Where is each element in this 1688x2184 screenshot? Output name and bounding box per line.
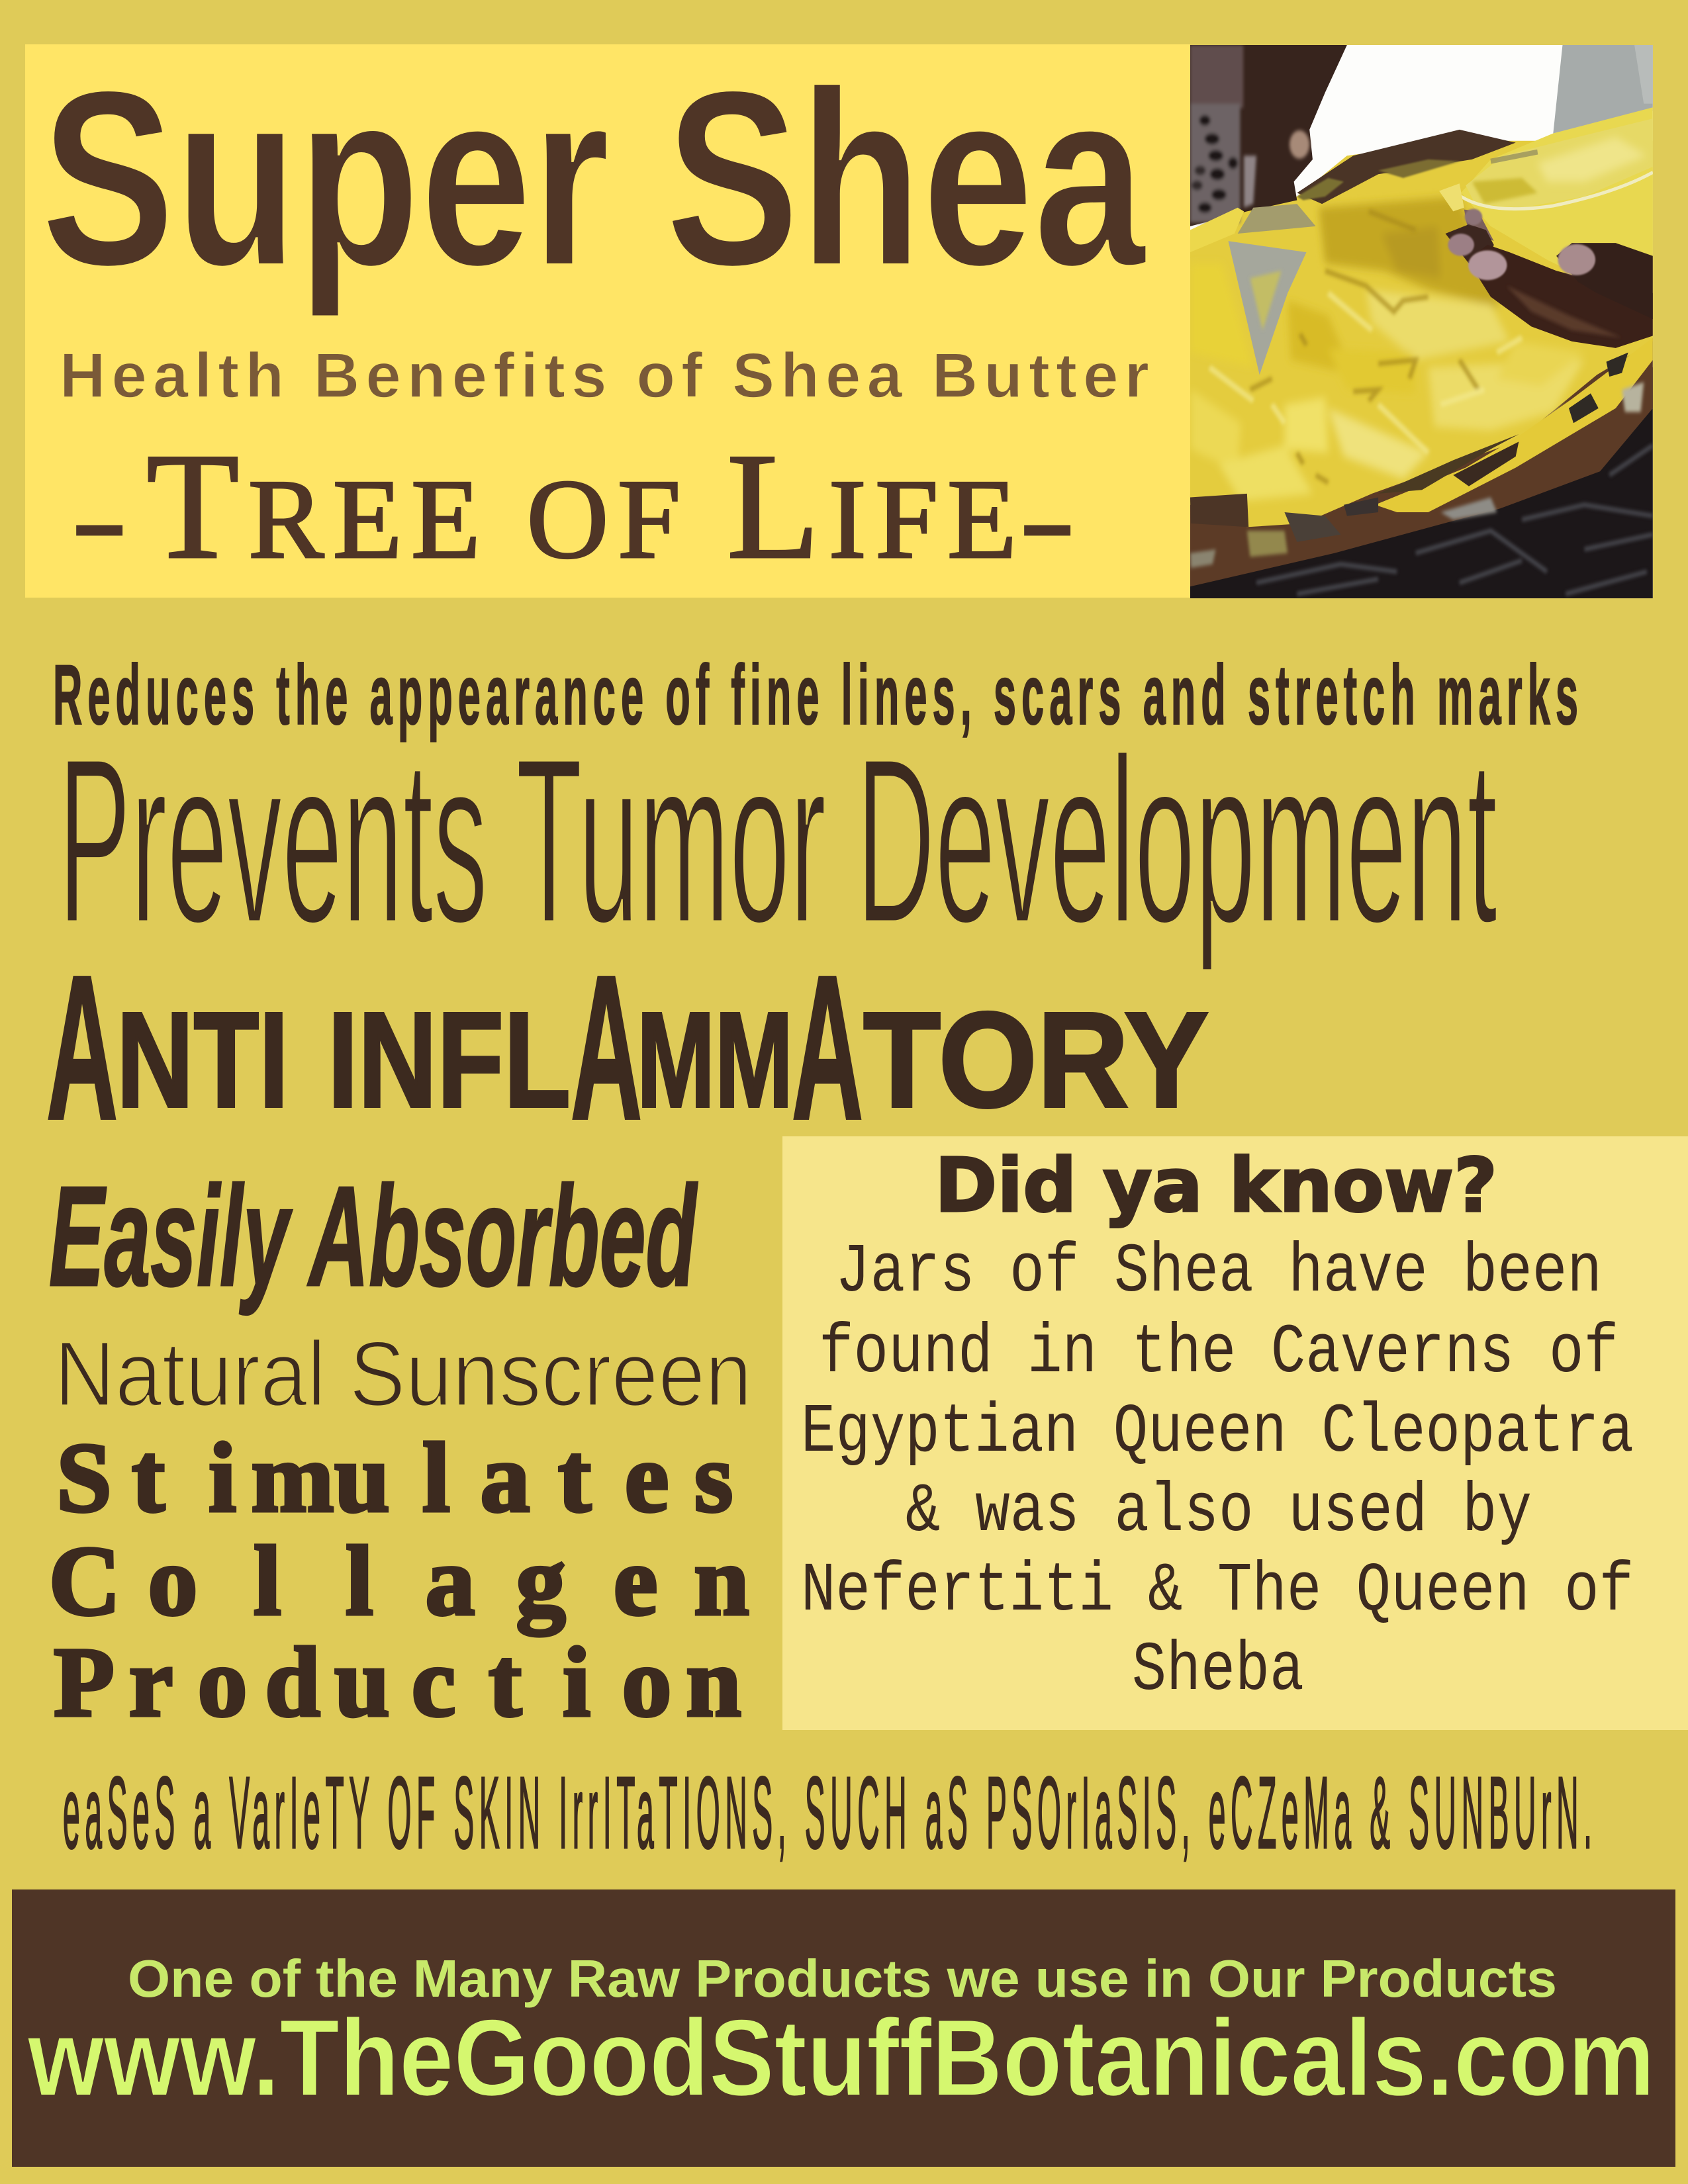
tagline: TREE OF LIFE [146,422,1017,590]
callout body [801,1233,1634,1710]
benefit: stimulates collagen production: Collagen [49,1526,749,1636]
benefit: anti inflammatory: INFL [328,984,571,1136]
benefit: stimulates collagen production [49,1423,749,1737]
benefit: easily absorbed: Easily Absorbed [49,1156,698,1316]
footer line: One of the Many Raw Products we use in Our Products [128,1949,1557,2008]
benefit: anti inflammatory: MM [637,984,793,1136]
benefit: stimulates collagen production: Production [54,1627,741,1737]
callout body: Sheba [1132,1631,1304,1710]
panel: did ya know [782,1136,1688,1730]
benefit: fine lines: Reduces the appearance of fine lines, scars and stretch marks [53,648,1578,743]
panel: footer [12,1889,1675,2167]
callout body: & was also used by [906,1473,1532,1551]
benefit: skin irritations: eaSeS a VarIeTY OF SKIN IrrITaTIONS, SUCH aS PSOrIaSIS, eCZeMa & SUNBUrN. [63,1756,1592,1870]
benefit: natural sunscreen: Natural Sunscreen [54,1322,752,1426]
benefit: anti inflammatory: A [46,933,118,1162]
tagline: - [71,457,127,582]
callout heading: Did ya know? [935,1143,1497,1229]
tagline: - [1019,457,1075,582]
benefit: stimulates collagen production: Stimulates [56,1423,733,1533]
benefit: anti inflammatory: TORY [863,984,1209,1136]
panel: header [25,39,1190,598]
benefit: anti inflammatory: A [792,933,863,1162]
benefit: anti inflammatory: A [571,933,642,1162]
subtitle: Health Benefits of Shea Butter [60,340,1149,411]
title: Super Shea [41,39,1147,320]
benefit: anti inflammatory: NTI [117,984,289,1136]
benefit: anti inflammatory [46,933,1209,1162]
photo: shea butter in a shell [1190,45,1653,598]
